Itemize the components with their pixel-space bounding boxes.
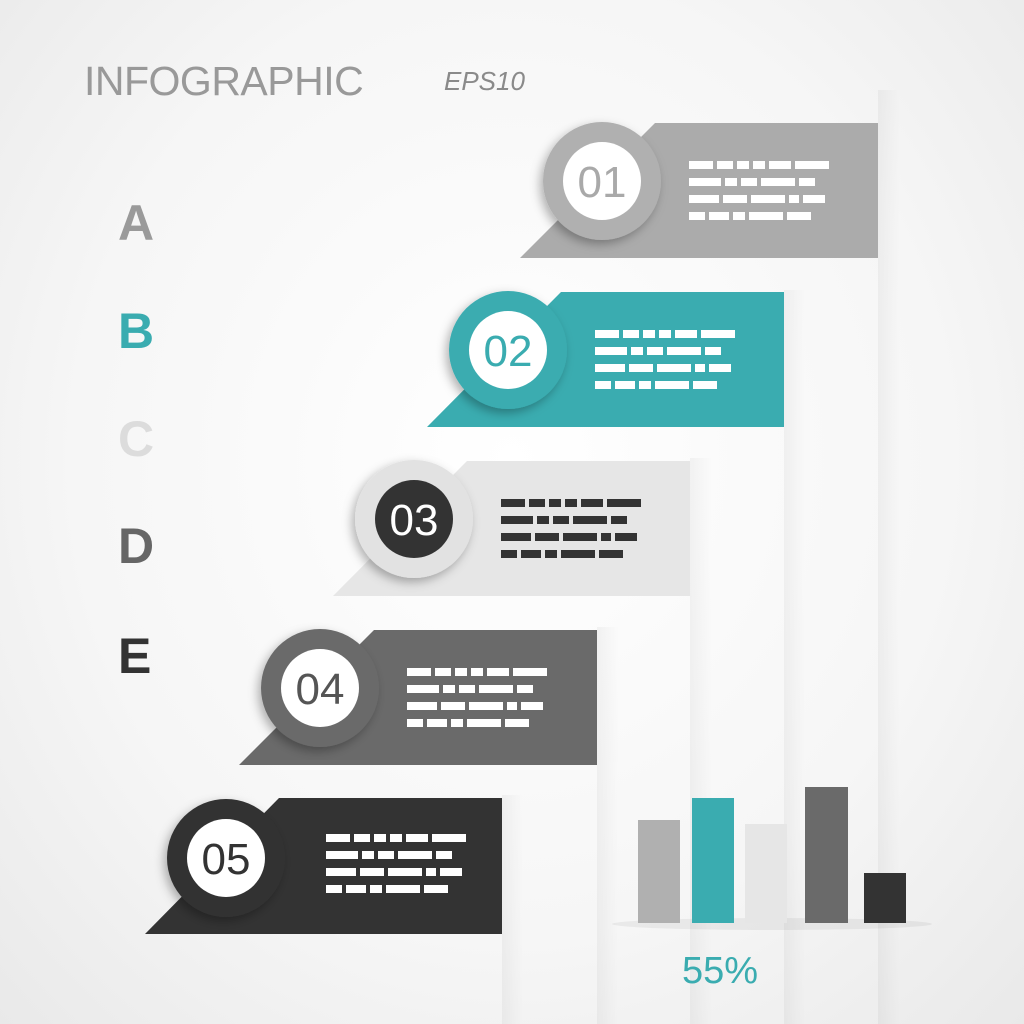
decorative column shadows	[502, 90, 900, 1024]
banner 01	[520, 122, 878, 258]
banner 04	[239, 629, 597, 765]
letter C: C	[118, 411, 154, 467]
banner 03	[333, 460, 690, 596]
bar chart	[612, 787, 932, 930]
letter D: D	[118, 518, 154, 574]
letter B: B	[118, 303, 154, 359]
letter A: A	[118, 195, 154, 251]
banner 04: 04	[296, 665, 344, 714]
subtitle: EPS10	[444, 66, 525, 96]
banner 02	[427, 291, 784, 427]
banner 03: 03	[390, 496, 438, 545]
percentage label: 55%	[682, 950, 758, 992]
banner 02: 02	[484, 327, 532, 376]
banner 01: 01	[578, 158, 626, 207]
letter E: E	[118, 628, 151, 684]
banner 05: 05	[202, 835, 250, 884]
banner 05	[145, 798, 502, 934]
title: INFOGRAPHIC	[84, 58, 363, 104]
